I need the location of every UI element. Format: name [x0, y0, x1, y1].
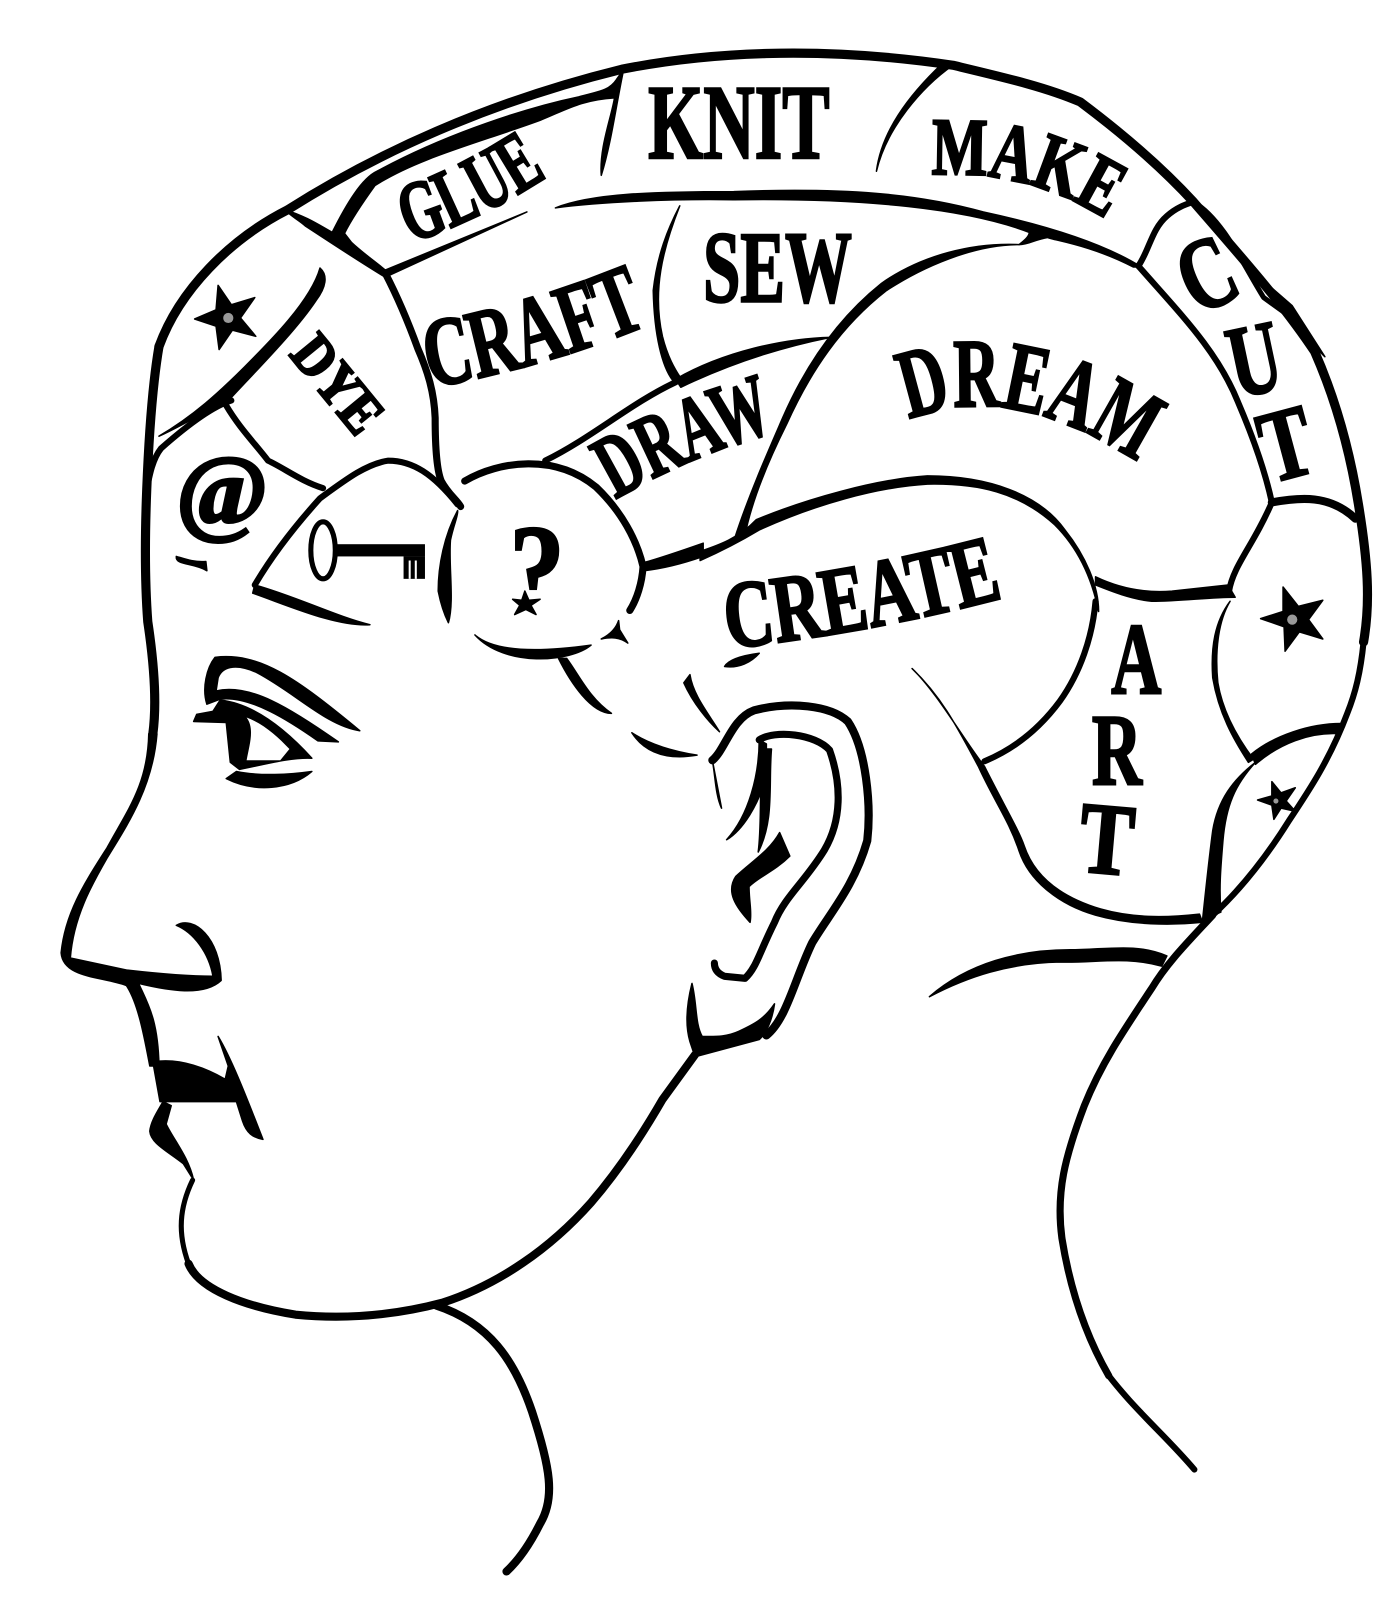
- icon: star, back of head: [1261, 587, 1323, 651]
- label: MAKE: MAKE: [932, 119, 1129, 218]
- region dividers: [147, 63, 1355, 924]
- temple strokes by the ear: [601, 621, 759, 757]
- label: DREAM: DREAM: [892, 341, 1170, 462]
- icon: small star, nape: [1258, 782, 1295, 819]
- icon: star, forehead: [195, 285, 256, 350]
- label: GLUE: GLUE: [400, 130, 546, 239]
- ear: [687, 706, 869, 1057]
- label: question mark with star: ?: [509, 499, 565, 644]
- neck shoulder crease: [929, 948, 1167, 997]
- label: CREATE: CREATE: [726, 536, 1001, 648]
- label: at sign: @: [176, 437, 268, 546]
- eye: [194, 657, 360, 788]
- label: CUT: C: [1159, 212, 1255, 337]
- throat: [436, 1305, 549, 1571]
- label: DRAW: DRAW: [586, 374, 763, 500]
- label: ART: R: [1092, 693, 1143, 807]
- label: DYE: DYE: [287, 329, 386, 438]
- label: CUT: T: [1247, 384, 1325, 505]
- jaw line: [181, 1055, 695, 1317]
- skull and back of neck outline: [159, 53, 1368, 1470]
- icon: key: [311, 522, 425, 579]
- label: CUT: U: [1218, 300, 1292, 421]
- face profile: [61, 346, 221, 1066]
- label: SEW: SEW: [703, 212, 852, 325]
- label: CRAFT: CRAFT: [425, 264, 641, 386]
- label: KNIT: KNIT: [648, 64, 830, 181]
- mouth: [150, 1036, 263, 1180]
- label: CUT: [1159, 212, 1325, 505]
- label: ART: A: [1111, 602, 1161, 715]
- label: ART: [1075, 602, 1161, 898]
- label: ART: T: [1075, 781, 1139, 898]
